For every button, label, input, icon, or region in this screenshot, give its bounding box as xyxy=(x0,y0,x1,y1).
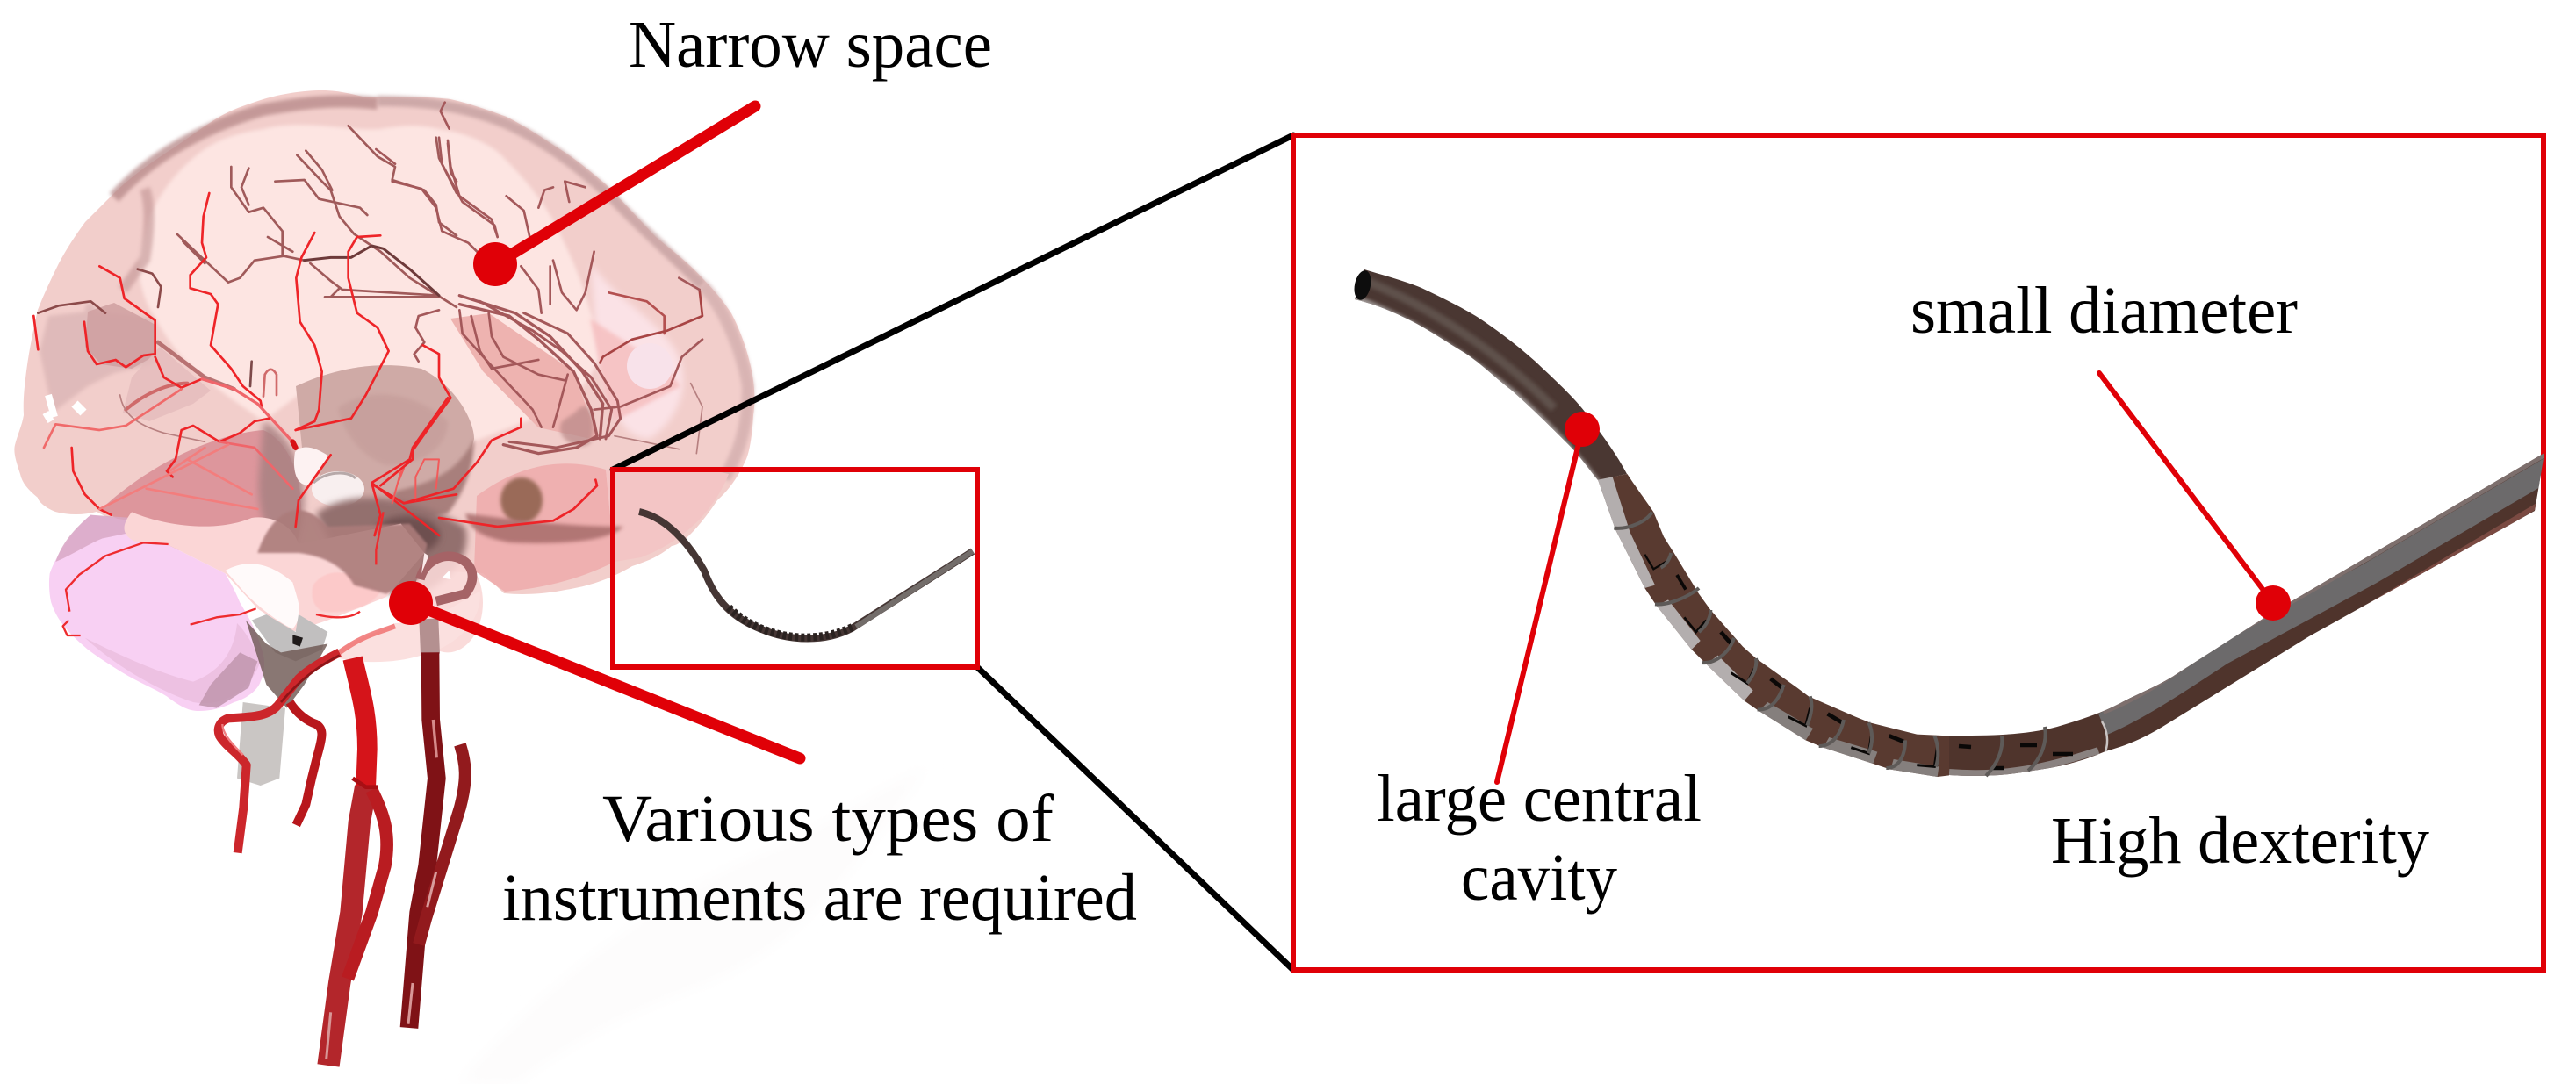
instrument close-up xyxy=(1343,255,2555,790)
pointer: various instruments xyxy=(389,581,800,758)
segment marks near shaft xyxy=(1959,745,2073,768)
pointer: large central cavity xyxy=(1497,412,1600,782)
small instrument in the detail box xyxy=(639,512,973,639)
label: small diameter: small diameter xyxy=(1910,274,2298,348)
dark base and brown lesion xyxy=(316,498,467,597)
cerebellum and brainstem xyxy=(49,510,483,1066)
outer left patches xyxy=(40,304,155,413)
label: Various types of instruments are required: instruments are required xyxy=(502,861,1137,935)
instrument location box xyxy=(613,470,977,667)
arterial loop near pointer xyxy=(420,556,472,601)
insula and central cluster shade xyxy=(450,313,597,439)
label: Narrow space: Narrow space xyxy=(629,8,992,82)
label: large central cavity xyxy=(1377,762,1702,915)
white ventricle xyxy=(294,448,329,485)
brown vessels: frontal and central xyxy=(38,126,457,441)
grey vascular mass above pointer xyxy=(257,510,428,594)
red arteries: posterior network xyxy=(380,345,597,527)
cortex upper rim xyxy=(114,102,378,197)
illustration: brain and arteries xyxy=(14,90,754,1066)
neck arteries xyxy=(219,619,465,1066)
straight shaft xyxy=(1949,453,2544,776)
label: High dexterity: High dexterity xyxy=(2051,804,2429,878)
floor shadow xyxy=(457,764,931,1084)
brown vessels: parietal and occipital xyxy=(376,103,702,454)
zoom guide lines xyxy=(613,135,1293,970)
cerebrum body xyxy=(14,90,754,597)
spinal cord xyxy=(237,702,285,786)
pointer: narrow space xyxy=(473,106,755,286)
thalamus xyxy=(296,365,474,509)
articulated section xyxy=(1598,474,1949,777)
instrument tip section xyxy=(1355,269,1627,480)
red arteries: anterior network xyxy=(33,193,457,535)
detail panel: instrument close-up xyxy=(1293,135,2555,970)
temporal lobe lower shading xyxy=(474,463,615,592)
label: Various types of instruments are required: Various types of xyxy=(602,782,1054,856)
label: large central cavity: cavity xyxy=(1461,841,1617,915)
label: large central cavity: large central xyxy=(1377,762,1702,836)
pointer: small diameter xyxy=(2099,373,2291,621)
cerebellum and brainstem veins xyxy=(63,512,384,635)
label: Various types of instruments are required xyxy=(502,782,1137,935)
